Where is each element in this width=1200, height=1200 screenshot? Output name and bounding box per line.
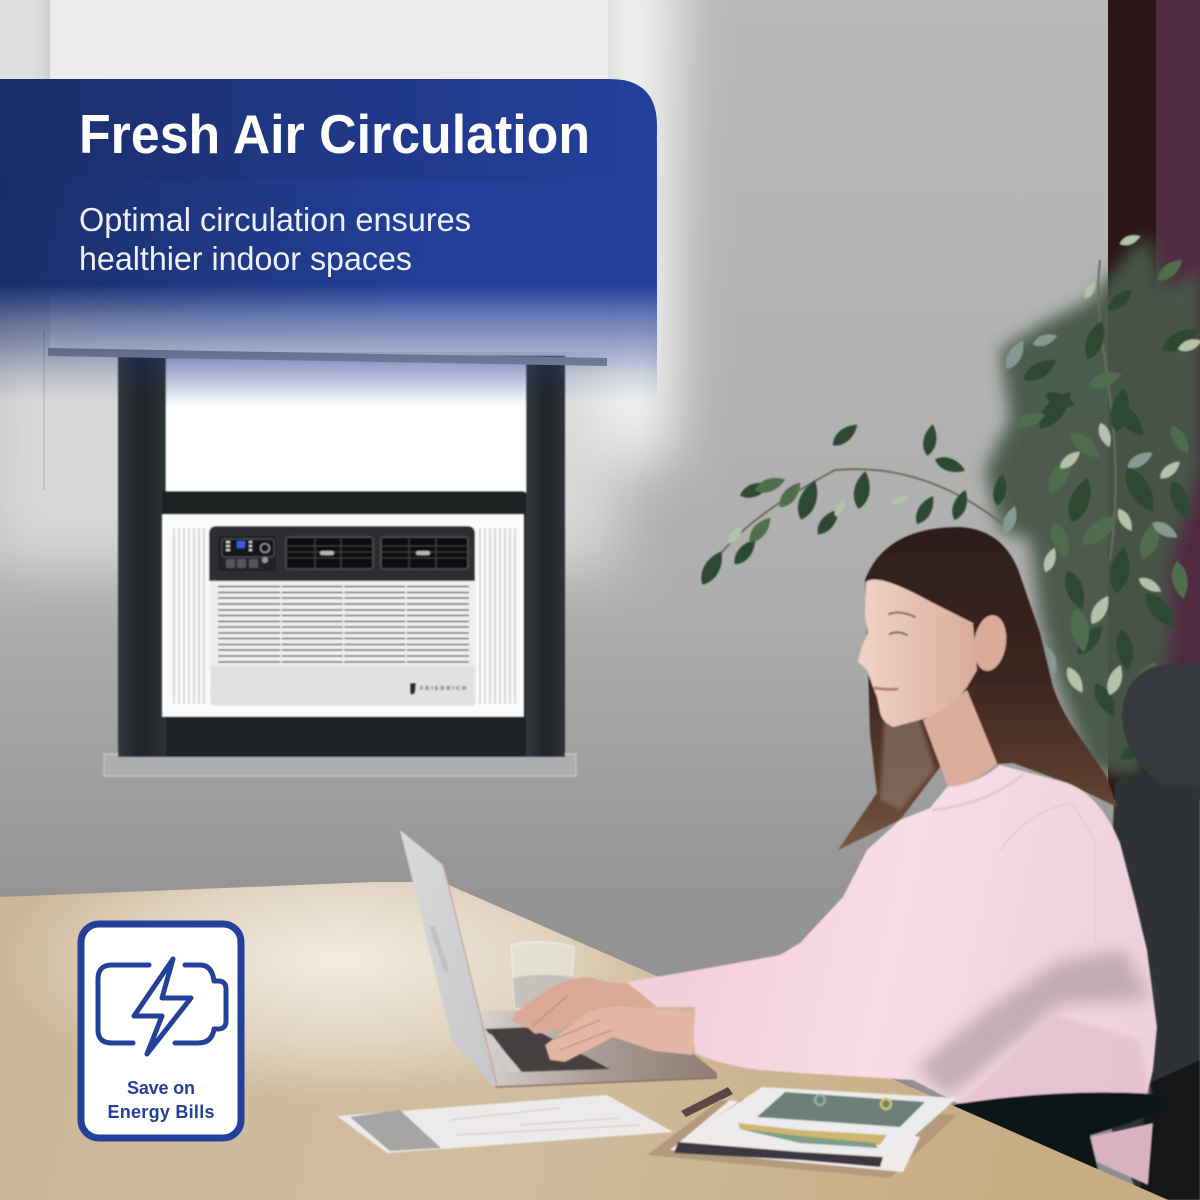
hair (838, 527, 1117, 850)
table edge overlay (880, 1088, 1168, 1200)
badge label: Energy Bills (108, 1102, 214, 1122)
collar (932, 774, 1024, 810)
window (104, 356, 576, 776)
subtitle: Optimal circulation ensures (79, 201, 471, 238)
ear (970, 613, 1010, 673)
grille (210, 581, 476, 665)
woman (627, 527, 1166, 1185)
window sill (104, 754, 576, 776)
badge: save on energy bills (81, 924, 241, 1138)
neck (923, 690, 997, 787)
title: Fresh Air Circulation (79, 103, 590, 165)
table (0, 882, 1168, 1200)
document (337, 1095, 673, 1153)
roller blind (44, 0, 608, 490)
report stack (647, 1087, 957, 1178)
plant (696, 232, 1200, 780)
vents (286, 537, 468, 569)
pen (681, 1087, 733, 1117)
sleeve shadow (915, 950, 1150, 1098)
control panel (218, 536, 276, 571)
laptop lid (400, 830, 497, 1085)
laptop (400, 830, 717, 1087)
body (210, 526, 476, 706)
blue text panel (0, 79, 657, 402)
badge label: Save on (127, 1078, 195, 1098)
sweater hem (1090, 1123, 1153, 1185)
office chair (1100, 663, 1200, 1200)
lower panel (211, 666, 474, 704)
face (858, 580, 977, 727)
shoulder seam (1000, 803, 1095, 950)
glass (511, 942, 574, 1008)
lock shading (880, 700, 935, 810)
subtitle (79, 201, 471, 277)
armrest (945, 1092, 1166, 1180)
panel body fading out (0, 140, 657, 402)
air conditioner (162, 514, 524, 717)
badge label (108, 1078, 214, 1122)
hands (512, 977, 695, 1062)
torso tone (960, 1015, 1150, 1103)
side louvers (174, 528, 515, 704)
laptop base (455, 1010, 717, 1087)
brand logo: FRIEDRICH (420, 686, 468, 692)
brand logo (410, 683, 468, 695)
control strip (209, 526, 475, 581)
facial details (875, 613, 915, 689)
sweater (627, 765, 1157, 1103)
sleeve frame (162, 514, 524, 717)
subtitle: healthier indoor spaces (79, 240, 412, 277)
icon: battery with lightning bolt (98, 959, 226, 1054)
curtain (1108, 0, 1200, 800)
heading band (0, 79, 657, 181)
keyboard (485, 1027, 610, 1072)
